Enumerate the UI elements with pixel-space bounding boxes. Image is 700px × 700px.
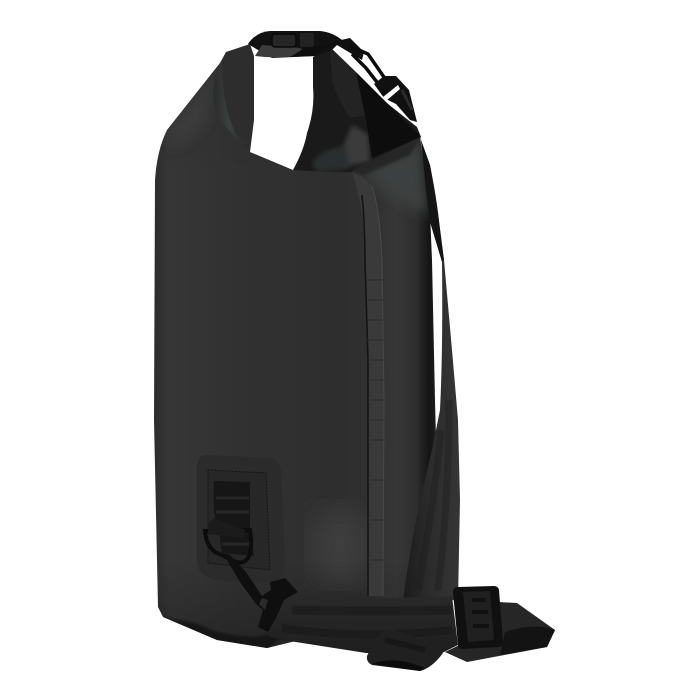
strap end right of slider bbox=[445, 602, 555, 662]
D-ring bbox=[205, 518, 251, 563]
bag body bbox=[154, 63, 436, 650]
webbing loop bbox=[214, 481, 254, 556]
top closure buckle bbox=[248, 31, 342, 58]
slider buckle bbox=[453, 586, 503, 649]
horizontal strap across the bottom bbox=[268, 596, 458, 654]
strap loop tail bbox=[367, 630, 443, 671]
strap anchor patch bbox=[197, 455, 285, 583]
vertical seam tape bbox=[352, 172, 384, 596]
product illustration: black roll-top dry bag bbox=[154, 31, 555, 671]
base dark band bbox=[164, 617, 280, 648]
strap clip at top right bbox=[332, 38, 417, 122]
roll top: left fold bbox=[213, 44, 254, 152]
roll top: right fold with creases bbox=[293, 47, 421, 176]
shoulder strap: vertical section beside bag bbox=[403, 140, 460, 602]
sheen under the right fold bbox=[368, 142, 428, 215]
swivel snap hook bbox=[223, 553, 298, 632]
